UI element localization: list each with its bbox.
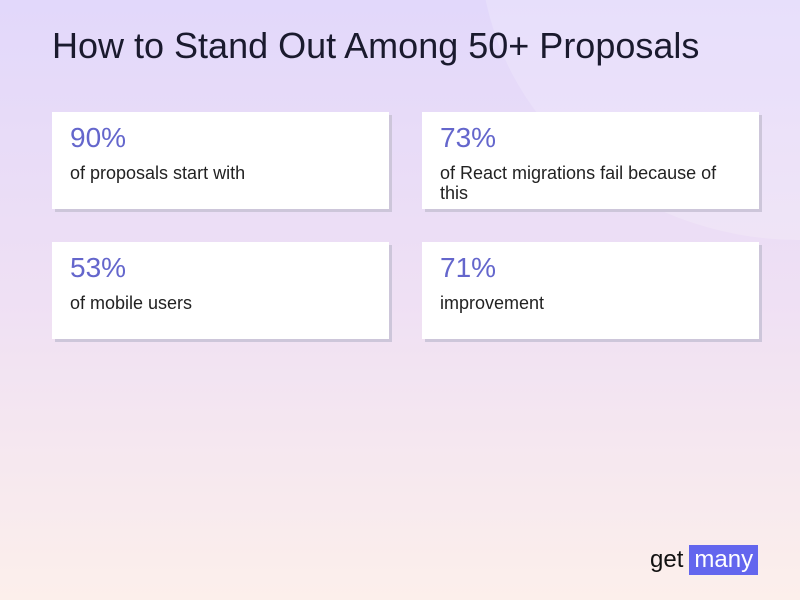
card: 73% bbox=[422, 112, 759, 209]
card: 73%: of React migrations fail because of this bbox=[440, 163, 716, 203]
card: 73%: 73% bbox=[440, 122, 496, 153]
logo: many bbox=[694, 546, 753, 573]
logo: get bbox=[650, 546, 683, 573]
card: 71% bbox=[422, 242, 759, 339]
card: 71%: improvement bbox=[440, 293, 544, 313]
card: 53% bbox=[52, 242, 389, 339]
card: 71%: 71% bbox=[440, 252, 496, 283]
card: 53%: of mobile users bbox=[70, 293, 192, 313]
card: 90%: of proposals start with bbox=[70, 163, 245, 183]
card: 53%: 53% bbox=[70, 252, 126, 283]
card: 90%: 90% bbox=[70, 122, 126, 153]
logo bbox=[650, 545, 758, 575]
card: 90% bbox=[52, 112, 389, 209]
title: How to Stand Out Among 50+ Proposals bbox=[52, 25, 699, 66]
